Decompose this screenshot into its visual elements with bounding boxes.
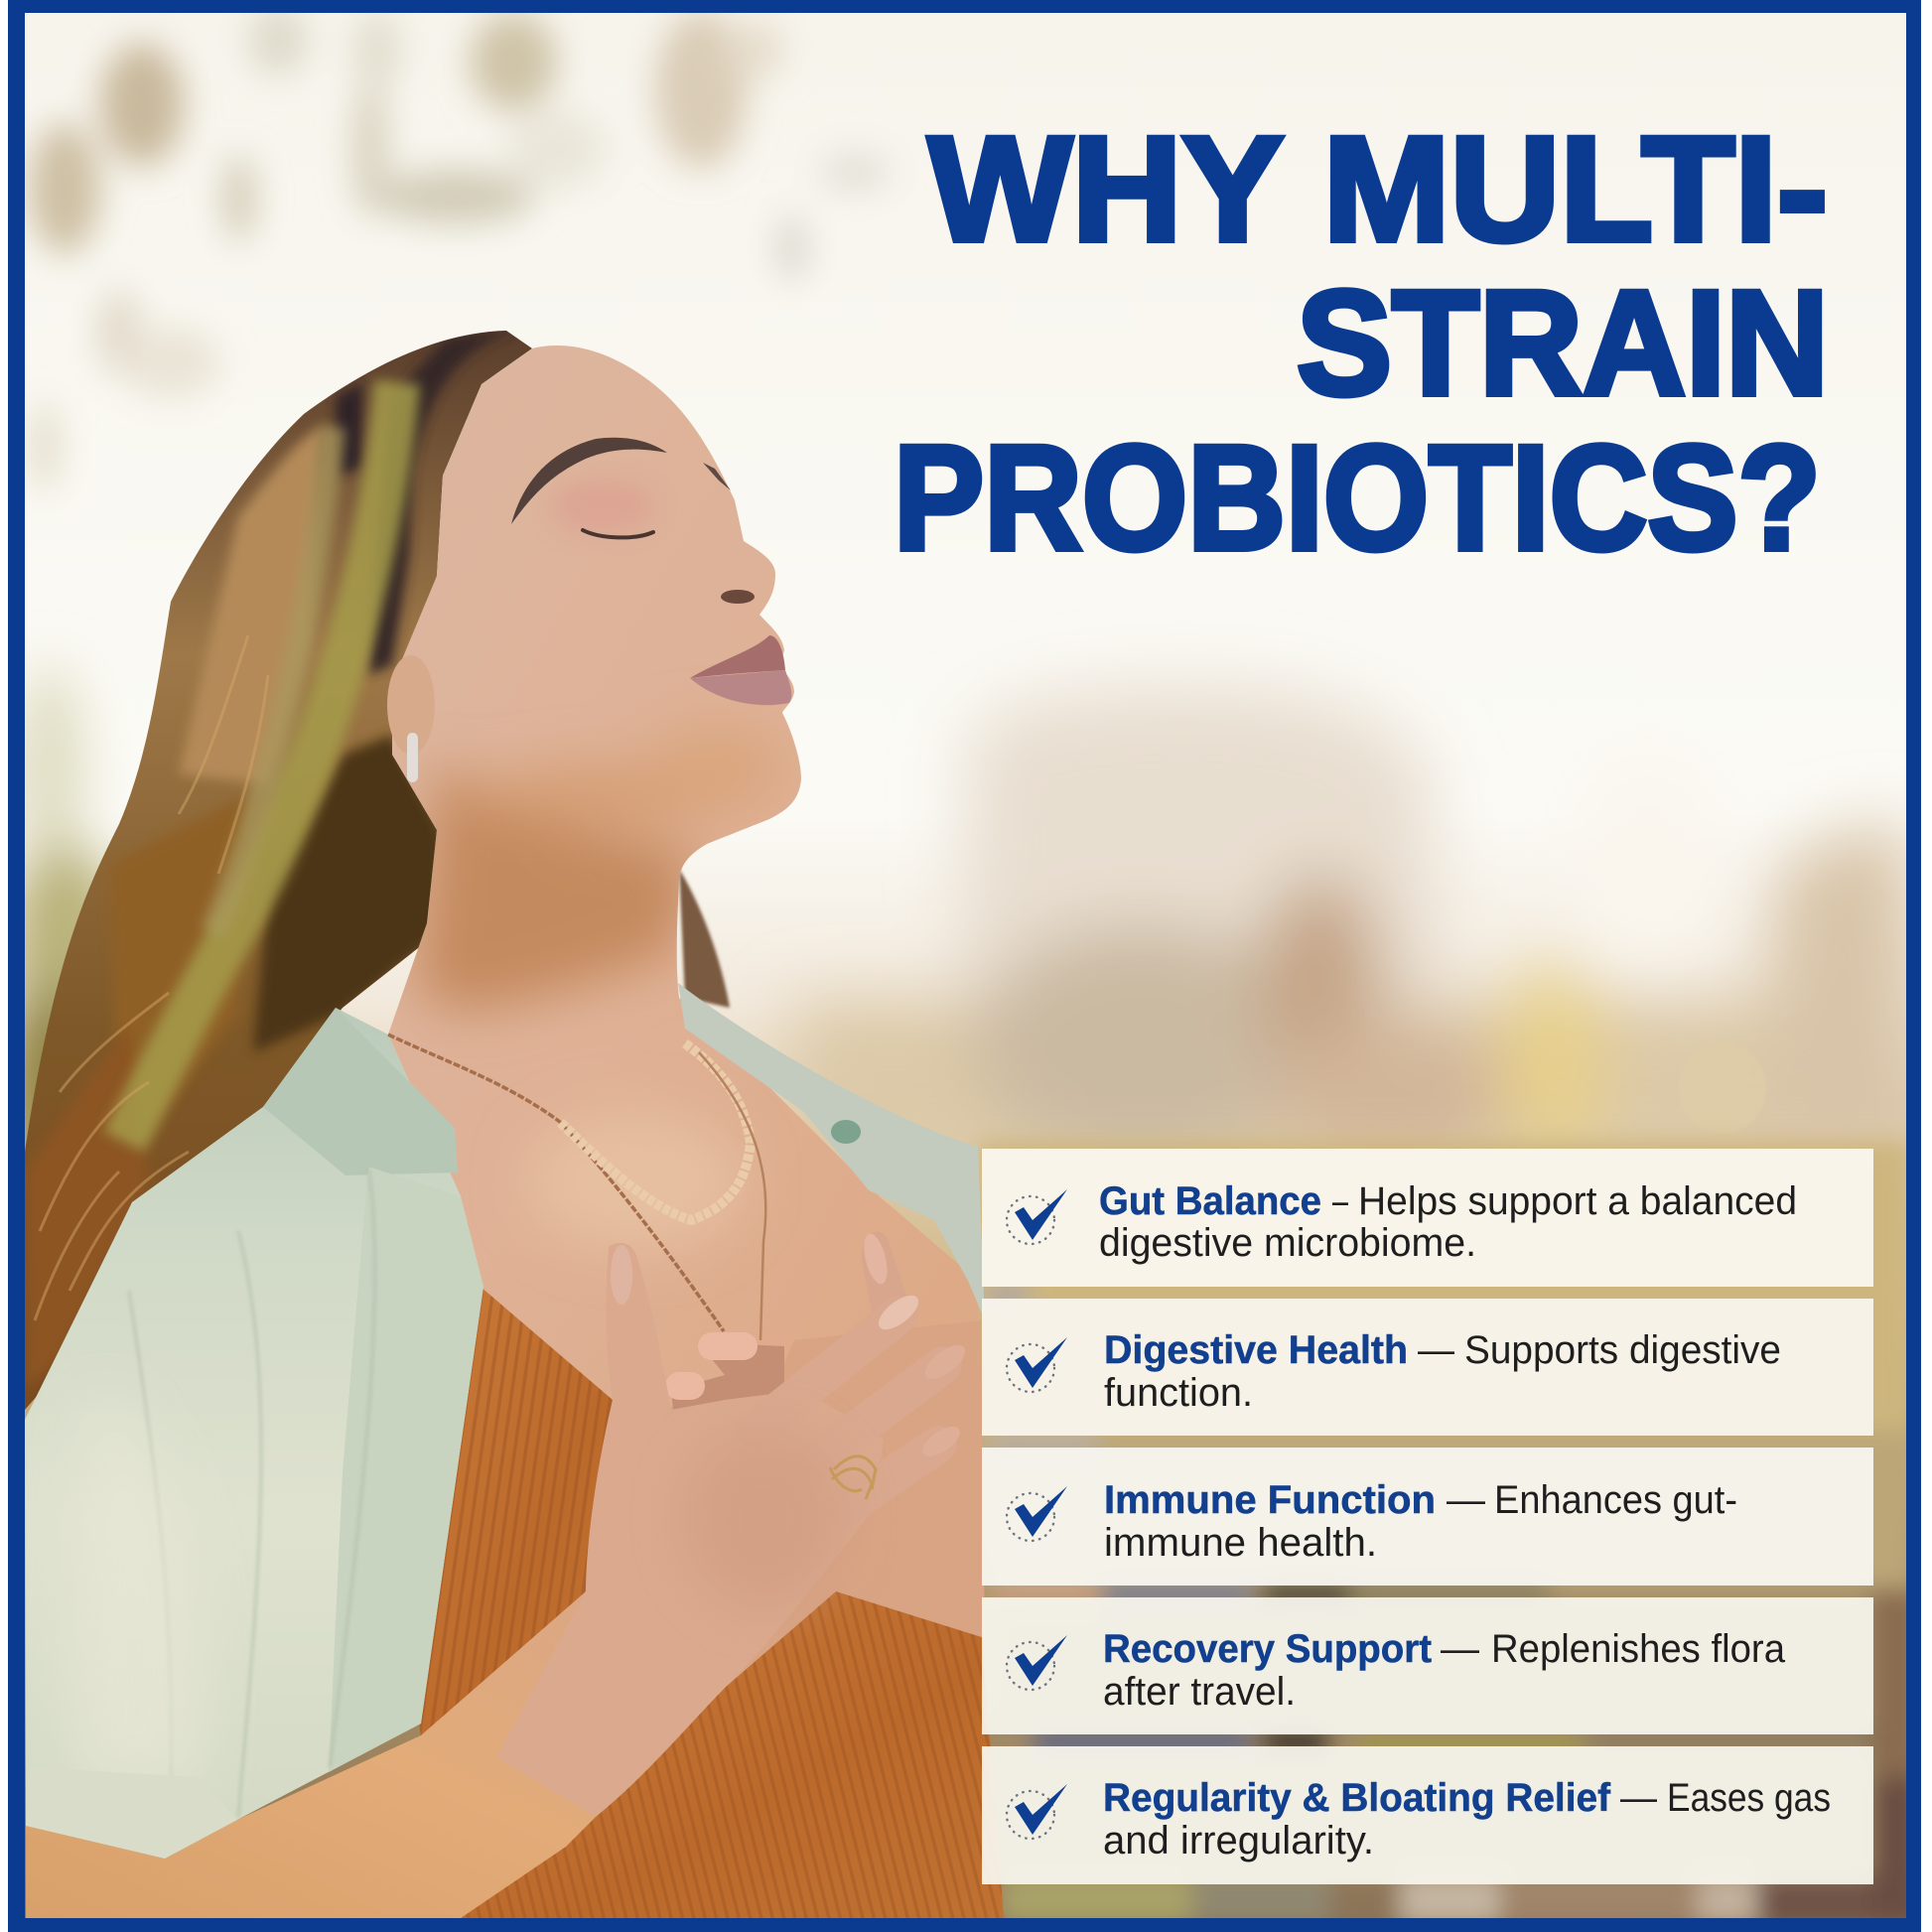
title: STRAIN — [1297, 259, 1829, 426]
text: immune function — [1104, 1478, 1737, 1565]
text: regularity and bloating relief — [1103, 1776, 1831, 1863]
panel: regularity and bloating relief — [982, 1746, 1873, 1884]
blurred foliage at the top — [29, 4, 891, 492]
shirt collar — [263, 1008, 458, 1175]
icon: check — [1007, 1189, 1067, 1244]
panel: digestive health — [982, 1299, 1873, 1436]
front hand — [496, 1243, 971, 1817]
text: gut balance: Gut Balance — [1099, 1179, 1321, 1223]
text: immune function: Immune Function — [1104, 1478, 1436, 1522]
neck and jaw shading — [417, 479, 784, 1251]
text: digestive health: Digestive Health — [1104, 1328, 1408, 1372]
closed eye — [583, 530, 653, 537]
panel: immune function — [982, 1448, 1873, 1586]
text: immune function: — — [1447, 1478, 1485, 1522]
text: recovery support: Recovery Support — [1103, 1627, 1432, 1671]
icon: check — [1007, 1337, 1067, 1392]
shirt sleeve hem — [26, 1767, 237, 1859]
woman figure — [25, 323, 1004, 1918]
eyelid blush — [550, 479, 653, 534]
text: gut balance: Helps support a balanced — [1358, 1179, 1797, 1223]
text: digestive health: function. — [1104, 1371, 1253, 1415]
text: recovery support — [1103, 1627, 1786, 1714]
text: digestive health: — — [1418, 1328, 1454, 1372]
text: digestive health — [1104, 1328, 1781, 1415]
blurred foreground grass stalks — [124, 382, 397, 1142]
text: recovery support: Replenishes flora — [1491, 1627, 1786, 1671]
shirt placket — [329, 1167, 483, 1772]
text: immune function: Enhances gut- — [1494, 1478, 1737, 1522]
text: immune function: immune health. — [1104, 1521, 1377, 1565]
text: gut balance: digestive microbiome. — [1099, 1221, 1476, 1265]
panel: gut balance — [982, 1149, 1873, 1287]
text: regularity and bloating relief: Regularity & Bloating Relief — [1103, 1776, 1611, 1820]
title: PROBIOTICS? — [894, 414, 1821, 581]
hair mass — [25, 323, 556, 1410]
icon: check — [1007, 1635, 1067, 1690]
text: digestive health: Supports digestive — [1464, 1328, 1781, 1372]
arm from sleeve to wrist — [26, 1591, 731, 1918]
skin: face neck and chest — [388, 345, 978, 1410]
text: gut balance — [1099, 1179, 1797, 1265]
hair strands — [35, 635, 268, 1320]
text: gut balance: – — [1332, 1179, 1349, 1223]
chest highlight — [536, 1116, 739, 1249]
orange ribbed top — [417, 1287, 1004, 1918]
blurred stripes behind the list — [978, 1142, 1926, 1926]
earring — [407, 733, 418, 782]
lapel pin — [831, 1120, 861, 1144]
necklaces — [388, 1035, 765, 1340]
icon: check — [1007, 1486, 1067, 1541]
panel: recovery support — [982, 1597, 1873, 1734]
title: WHY MULTI- — [928, 105, 1828, 272]
lips — [690, 635, 791, 705]
hair behind the neck — [679, 869, 730, 1008]
text: regularity and bloating relief: and irregularity. — [1103, 1819, 1374, 1863]
fingernails — [611, 1245, 632, 1305]
text: regularity and bloating relief: — — [1620, 1776, 1657, 1820]
title — [894, 105, 1829, 581]
bokeh circle — [1679, 1042, 1766, 1134]
other hand beneath — [665, 1231, 985, 1688]
left shirt panel — [25, 1008, 483, 1859]
ear — [387, 655, 435, 755]
nostril — [721, 590, 755, 604]
text: recovery support: after travel. — [1103, 1670, 1296, 1714]
right shirt lapel — [678, 983, 985, 1320]
eyebrows — [511, 438, 731, 524]
blurred olive foliage at the left — [25, 655, 117, 1152]
blurred hills on the right — [794, 685, 1926, 1172]
text: recovery support: — — [1441, 1627, 1479, 1671]
fingers — [755, 1315, 943, 1509]
text: regularity and bloating relief: Eases gas — [1667, 1776, 1831, 1820]
ring — [830, 1456, 876, 1499]
icon: check — [1007, 1784, 1067, 1839]
